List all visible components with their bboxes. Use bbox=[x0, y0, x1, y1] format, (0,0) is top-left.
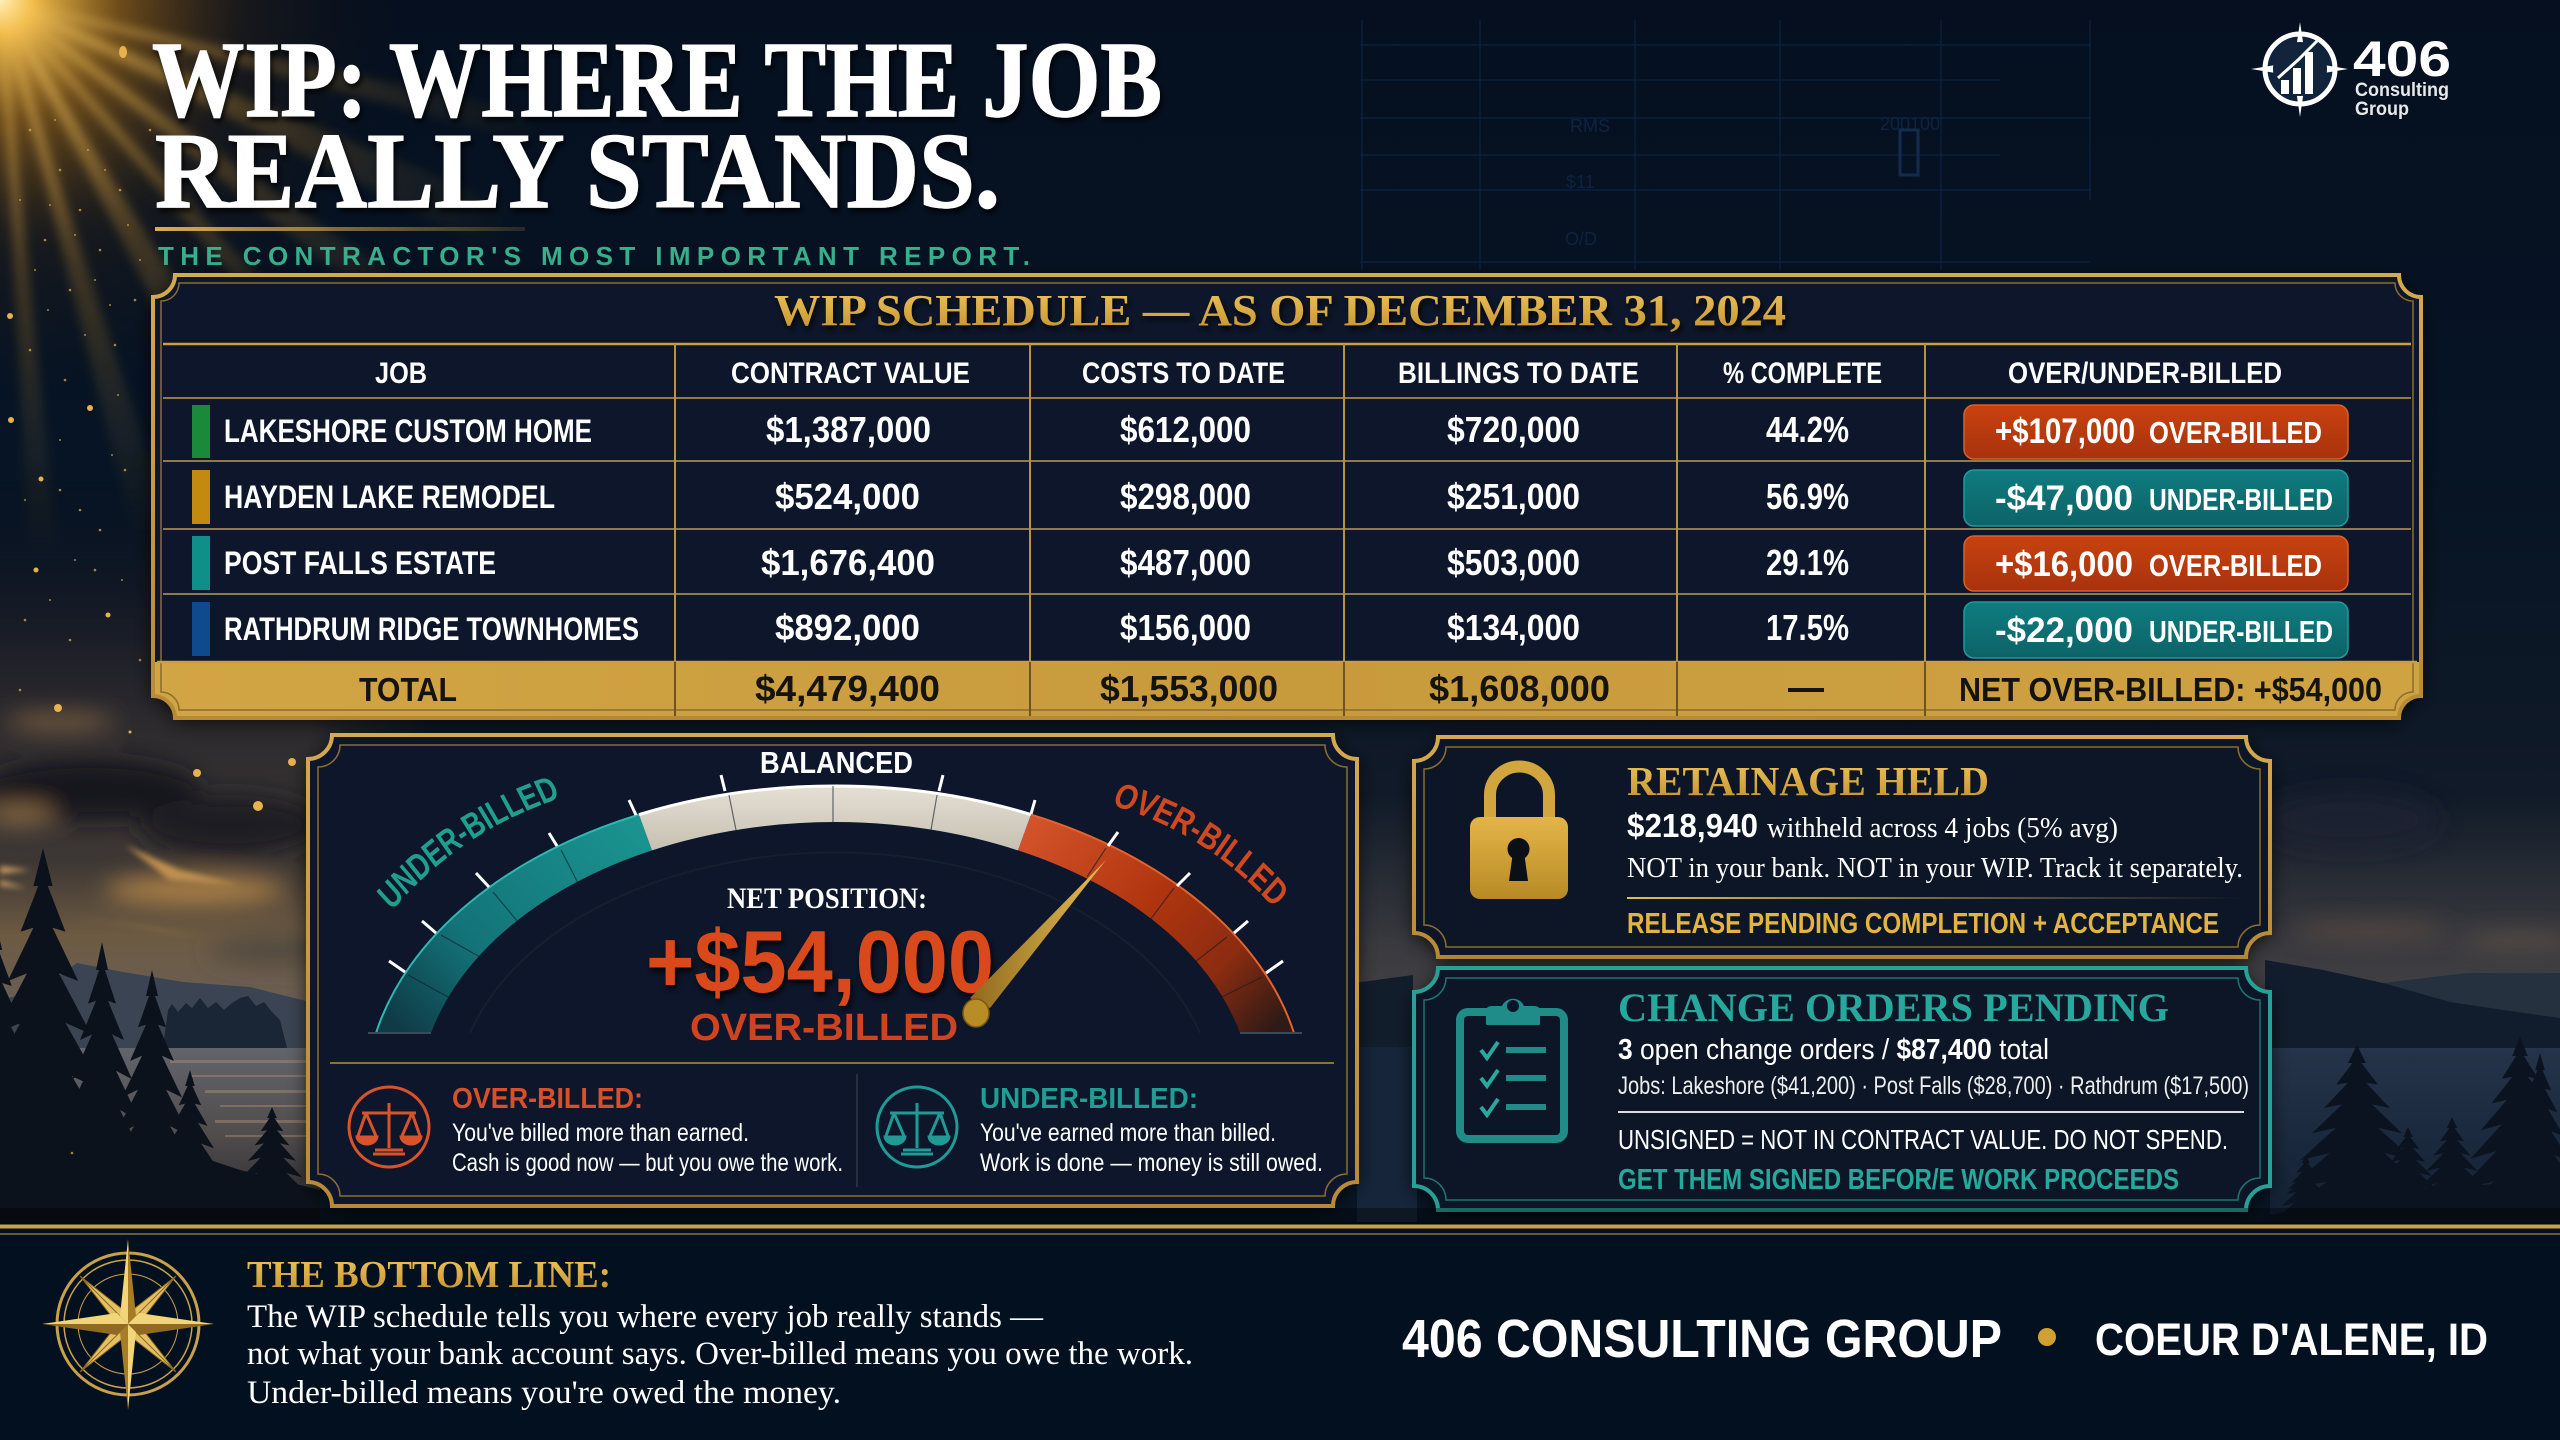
row: Lakeshore Custom Home: $612,000 bbox=[1120, 409, 1251, 450]
text: under-billed meaning bbox=[980, 1083, 1323, 1177]
bottom line text: not what your bank account says. Over-billed means you owe the work. bbox=[247, 1336, 1193, 1372]
subtitle: THE CONTRACTOR'S MOST IMPORTANT REPORT. bbox=[158, 241, 1030, 271]
bottom line text: Under-billed means you're owed the money. bbox=[247, 1375, 841, 1411]
footer: company and location: 406 CONSULTING GROUP bbox=[1402, 1309, 2002, 1369]
text: over-billed meaning bbox=[452, 1083, 843, 1177]
row: Post Falls Estate: $503,000 bbox=[1447, 542, 1580, 583]
logo: 406 Consulting Group bbox=[2251, 22, 2451, 120]
bottom band bbox=[0, 1208, 2560, 1440]
row: Hayden Lake Remodel: $298,000 bbox=[1120, 476, 1251, 517]
change order text bbox=[1618, 985, 2249, 1196]
background scene: RMS bbox=[1570, 116, 1610, 136]
row: Rathdrum Ridge Townhomes: -$22,000 bbox=[1995, 611, 2133, 650]
retainage text: RELEASE PENDING COMPLETION + ACCEPTANCE bbox=[1627, 908, 2219, 940]
logo: 406 Consulting Group: Consulting bbox=[2355, 80, 2449, 101]
gauge arc bbox=[368, 775, 1302, 1033]
column headers: COSTS TO DATE bbox=[1082, 357, 1285, 390]
row: Hayden Lake Remodel: HAYDEN LAKE REMODEL bbox=[224, 479, 555, 515]
row: Post Falls Estate: $1,676,400 bbox=[761, 542, 935, 583]
row: Post Falls Estate: +$16,000 bbox=[1995, 545, 2133, 584]
total row: NET OVER-BILLED: +$54,000 bbox=[1959, 671, 2382, 708]
gold sparks bbox=[7, 46, 296, 1154]
bottom line text bbox=[247, 1254, 1193, 1411]
gauge needle bbox=[963, 860, 1106, 1027]
row: Lakeshore Custom Home: 44.2% bbox=[1766, 409, 1849, 450]
column headers: JOB bbox=[375, 357, 427, 390]
row: Lakeshore Custom Home: LAKESHORE CUSTOM HOME bbox=[224, 413, 592, 449]
column headers: CONTRACT VALUE bbox=[731, 357, 970, 390]
net position value: NET POSITION: bbox=[727, 882, 927, 915]
footer: company and location bbox=[1402, 1309, 2488, 1369]
change order text: GET THEM SIGNED BEFOR/E WORK PROCEEDS bbox=[1618, 1164, 2179, 1196]
row: Rathdrum Ridge Townhomes bbox=[192, 602, 2348, 658]
text: over-billed meaning: Cash is good now — but you owe the work. bbox=[452, 1149, 843, 1177]
row: Post Falls Estate: 29.1% bbox=[1766, 542, 1849, 583]
row: Post Falls Estate: POST FALLS ESTATE bbox=[224, 545, 496, 581]
row: Lakeshore Custom Home: $1,387,000 bbox=[766, 409, 931, 450]
row: Hayden Lake Remodel: $251,000 bbox=[1447, 476, 1580, 517]
title: REALLY STANDS. bbox=[155, 112, 1000, 231]
icon: clipboard bbox=[1460, 999, 1564, 1139]
retainage text bbox=[1627, 758, 2243, 940]
net position value: OVER-BILLED bbox=[690, 1007, 958, 1049]
sun glow and rays bbox=[0, 0, 420, 420]
text: under-billed meaning: You've earned more than billed. bbox=[980, 1119, 1276, 1147]
row: Hayden Lake Remodel: UNDER-BILLED bbox=[2149, 482, 2333, 517]
row: Lakeshore Custom Home bbox=[192, 405, 2348, 459]
background scene: O/D bbox=[1565, 229, 1597, 249]
blueprint grid stays faint bbox=[1360, 20, 2090, 270]
table heading: WIP SCHEDULE — AS OF DECEMBER 31, 2024 bbox=[774, 286, 1786, 335]
column headers: OVER/UNDER-BILLED bbox=[2008, 357, 2282, 390]
gauge label: over-billed: OVER-BILLED bbox=[1116, 784, 1286, 904]
gauge label: under-billed: UNDER-BILLED bbox=[376, 778, 557, 906]
row: Hayden Lake Remodel: -$47,000 bbox=[1995, 479, 2133, 518]
text: under-billed meaning: UNDER-BILLED: bbox=[980, 1083, 1198, 1115]
change order text: 3 open change orders / $87,400 total bbox=[1618, 1034, 2049, 1066]
footer: company and location: COEUR D'ALENE, ID bbox=[2095, 1314, 2488, 1365]
total row: $1,608,000 bbox=[1429, 668, 1610, 709]
row: Rathdrum Ridge Townhomes: UNDER-BILLED bbox=[2149, 614, 2333, 649]
column headers bbox=[375, 357, 2282, 390]
retainage text: $218,940 bbox=[1627, 807, 1758, 844]
row: Hayden Lake Remodel bbox=[192, 470, 2348, 526]
text: over-billed meaning: You've billed more than earned. bbox=[452, 1119, 749, 1147]
row: Rathdrum Ridge Townhomes: $156,000 bbox=[1120, 607, 1251, 648]
row: Hayden Lake Remodel: $524,000 bbox=[775, 476, 920, 517]
panel: change orders pending bbox=[1414, 968, 2270, 1210]
row: Rathdrum Ridge Townhomes: $134,000 bbox=[1447, 607, 1580, 648]
net position value: +$54,000 bbox=[646, 912, 994, 1011]
gauge label: balanced: BALANCED bbox=[760, 745, 913, 780]
logo: 406 Consulting Group: Group bbox=[2355, 99, 2409, 120]
bottom line text: THE BOTTOM LINE: bbox=[247, 1254, 611, 1296]
text: under-billed meaning: Work is done — money is still owed. bbox=[980, 1149, 1323, 1177]
total row bbox=[359, 668, 2382, 709]
retainage text: RETAINAGE HELD bbox=[1627, 758, 1989, 804]
row: Post Falls Estate bbox=[192, 536, 2348, 591]
row: Rathdrum Ridge Townhomes: RATHDRUM RIDGE TOWNHOMES bbox=[224, 611, 639, 647]
total row: TOTAL bbox=[359, 671, 457, 708]
background scene: $11 bbox=[1566, 172, 1595, 192]
title bbox=[152, 21, 1162, 231]
mountains and lake bbox=[0, 963, 310, 1048]
row: Lakeshore Custom Home: OVER-BILLED bbox=[2149, 415, 2322, 450]
background scene: 200100 bbox=[1880, 114, 1940, 134]
icon: padlock bbox=[1470, 767, 1568, 899]
panel: retainage held bbox=[1414, 737, 2270, 957]
title: WIP: WHERE THE JOB bbox=[152, 21, 1162, 140]
row: Rathdrum Ridge Townhomes: $892,000 bbox=[775, 607, 920, 648]
row: Lakeshore Custom Home: $720,000 bbox=[1447, 409, 1580, 450]
total row: $4,479,400 bbox=[755, 668, 940, 709]
retainage text: withheld across 4 jobs (5% avg) bbox=[1767, 813, 2118, 844]
row: Post Falls Estate: OVER-BILLED bbox=[2149, 548, 2322, 583]
total row: $1,553,000 bbox=[1100, 668, 1278, 709]
logo: 406 Consulting Group: 406 bbox=[2353, 31, 2451, 87]
column headers: % COMPLETE bbox=[1723, 357, 1882, 390]
icon: under-billed scales bbox=[877, 1087, 957, 1167]
row: Rathdrum Ridge Townhomes: 17.5% bbox=[1766, 607, 1849, 648]
column headers: BILLINGS TO DATE bbox=[1398, 357, 1639, 390]
panel: net position gauge bbox=[294, 733, 1366, 1211]
change order text: Jobs: Lakeshore ($41,200) · Post Falls ($28,700) · Rathdrum ($17,500) bbox=[1618, 1072, 2249, 1100]
text: over-billed meaning: OVER-BILLED: bbox=[452, 1083, 643, 1115]
retainage text: NOT in your bank. NOT in your WIP. Track it separately. bbox=[1627, 853, 2243, 884]
row: Hayden Lake Remodel: 56.9% bbox=[1766, 476, 1849, 517]
tree silhouettes bbox=[0, 848, 320, 1230]
icon: over-billed scales bbox=[349, 1087, 429, 1167]
row: Lakeshore Custom Home: +$107,000 bbox=[1995, 412, 2135, 451]
change order text: UNSIGNED = NOT IN CONTRACT VALUE. DO NOT SPEND. bbox=[1618, 1124, 2228, 1155]
net position value bbox=[646, 882, 994, 1049]
row: Post Falls Estate: $487,000 bbox=[1120, 542, 1251, 583]
bottom line text: The WIP schedule tells you where every job really stands — bbox=[247, 1299, 1044, 1335]
change order text: CHANGE ORDERS PENDING bbox=[1618, 985, 2169, 1030]
icon: compass rose bbox=[42, 1239, 214, 1410]
panel: WIP schedule table bbox=[153, 275, 2421, 718]
